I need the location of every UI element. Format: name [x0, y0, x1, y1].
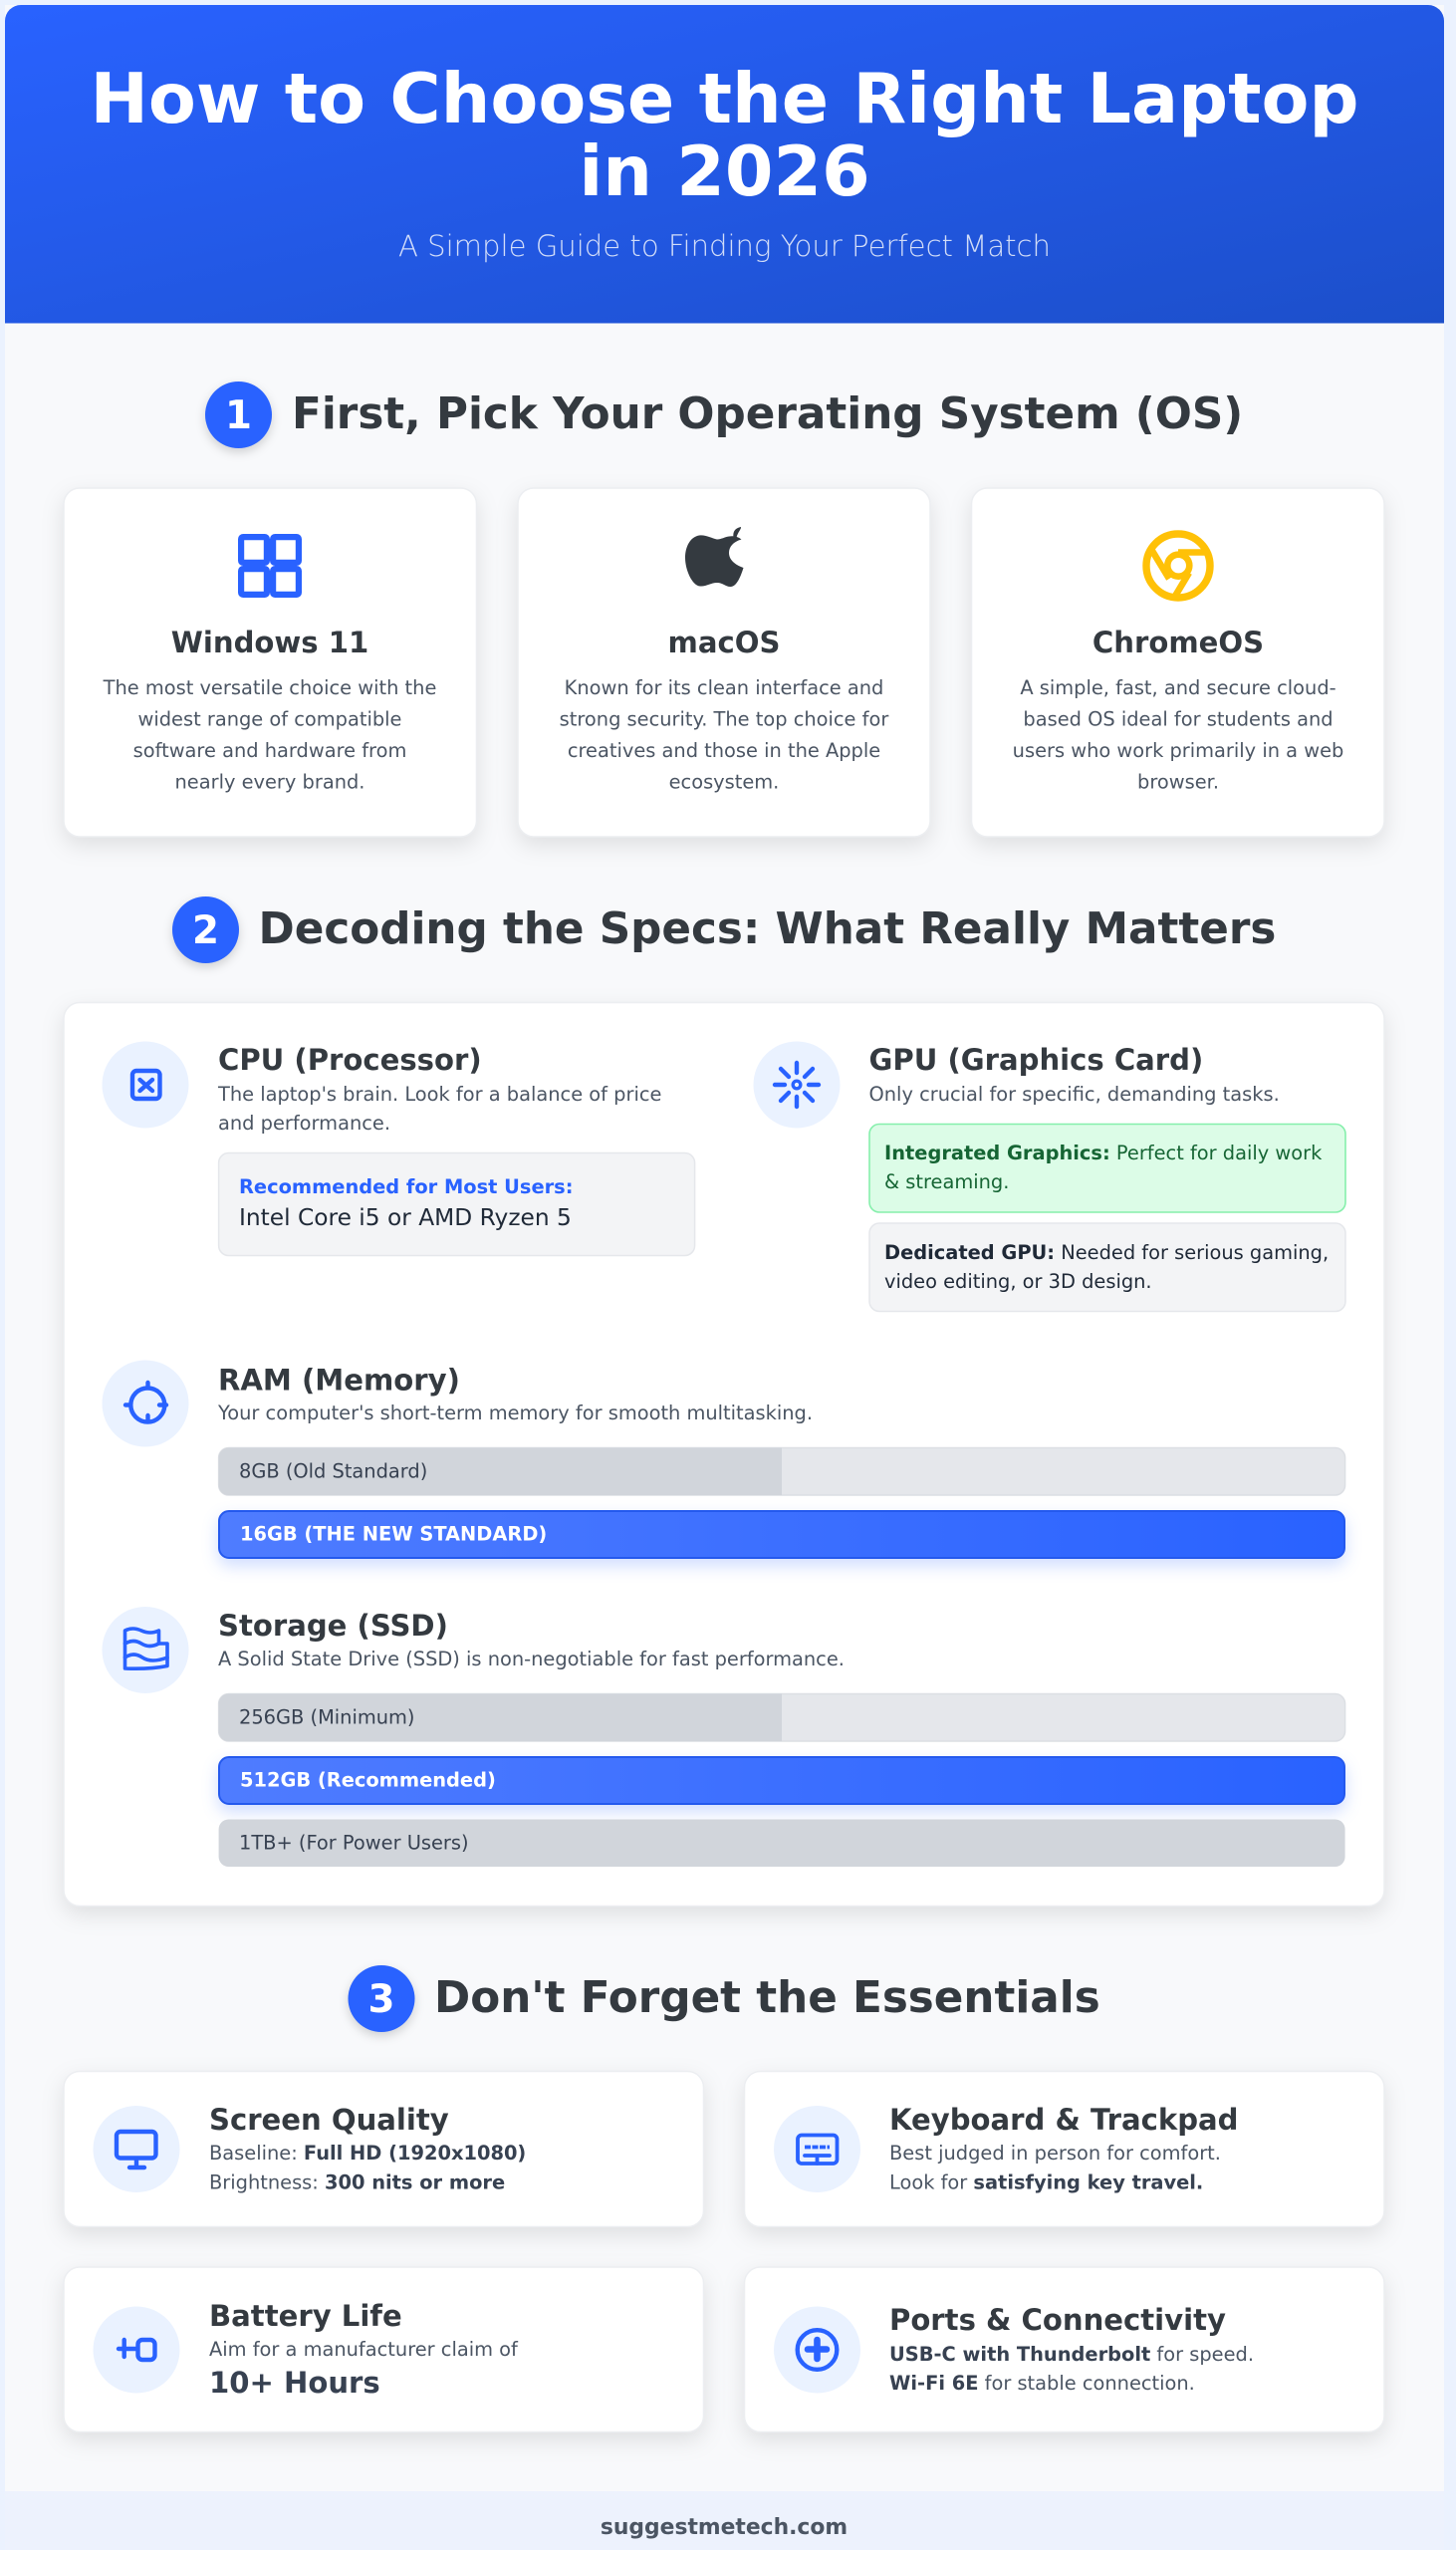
panel: ChromeOS: browser. — [1137, 771, 1219, 793]
panel: ports: Wi-Fi 6E — [889, 2372, 978, 2395]
section 2 heading: 2 — [192, 908, 219, 953]
panel: macOS: ecosystem. — [669, 771, 779, 793]
icon: battery — [119, 2340, 155, 2360]
subtitle: A Simple Guide to Finding Your Perfect Match — [398, 229, 1051, 263]
panel: specs — [64, 1002, 1384, 1907]
icon: chrome — [1146, 534, 1210, 598]
callout: dedicated GPU: Dedicated GPU: — [884, 1241, 1055, 1264]
panel: ports — [745, 2267, 1384, 2432]
RAM block — [102, 1361, 1345, 1558]
bar: 16GB — [219, 1511, 1344, 1558]
GPU block: GPU (Graphics Card) — [868, 1043, 1203, 1077]
icon: windows — [241, 537, 299, 595]
panel: macOS: strong security. The top choice for — [560, 707, 888, 731]
icon: ram — [125, 1383, 166, 1422]
bar: 1TB: 1TB+ (For Power Users) — [239, 1831, 469, 1855]
panel: ports: USB-C with Thunderbolt — [889, 2343, 1150, 2366]
panel: screen quality — [64, 2072, 703, 2227]
bar: 8GB: 8GB (Old Standard) — [239, 1460, 427, 1482]
callout: integrated graphics: Integrated Graphics: — [884, 1142, 1110, 1164]
panel: Windows 11: Windows 11 — [171, 626, 368, 659]
panel: screen quality: 300 nits or more — [325, 2171, 505, 2193]
callout: dedicated GPU: video editing, or 3D design. — [884, 1270, 1152, 1293]
callout: dedicated GPU — [869, 1223, 1345, 1311]
panel: ports: for speed. — [1150, 2343, 1254, 2366]
footer: suggestmetech.com — [601, 2515, 848, 2540]
icon: cpu — [132, 1071, 159, 1099]
panel: Windows 11: The most versatile choice with the — [103, 676, 436, 699]
bar: 256GB — [219, 1693, 1345, 1741]
panel: ChromeOS — [972, 488, 1384, 837]
bar: 1TB — [219, 1819, 1345, 1867]
panel: battery: 10+ Hours — [209, 2366, 380, 2400]
CPU block — [102, 1042, 695, 1255]
panel: screen quality: Screen Quality — [209, 2103, 449, 2137]
CPU block: The laptop's brain. Look for a balance of price — [217, 1083, 661, 1106]
GPU block — [753, 1042, 1345, 1311]
panel: keyboard — [745, 2072, 1384, 2227]
panel: keyboard: Keyboard & Trackpad — [889, 2103, 1239, 2137]
section 1 heading: First, Pick Your Operating System (OS) — [292, 388, 1243, 439]
section 1 heading: 1 — [225, 393, 252, 438]
callout: recommended CPU: Intel Core i5 or AMD Ryzen 5 — [239, 1204, 572, 1231]
section 3 heading — [349, 1965, 1100, 2032]
panel: Windows 11: software and hardware from — [133, 739, 406, 762]
panel: macOS — [518, 488, 930, 837]
panel: battery: Aim for a manufacturer claim of — [209, 2338, 519, 2361]
callout: integrated graphics: Perfect for daily work — [1110, 1142, 1323, 1164]
panel: keyboard: Look for — [889, 2171, 973, 2193]
panel: screen quality: Full HD (1920x1080) — [304, 2142, 526, 2165]
panel: battery — [64, 2267, 703, 2432]
section 3 heading: Don't Forget the Essentials — [434, 1972, 1100, 2023]
panel: screen quality: Brightness: — [209, 2171, 325, 2193]
callout: dedicated GPU: Needed for serious gaming, — [1055, 1241, 1329, 1264]
panel: ChromeOS: based OS ideal for students and — [1023, 707, 1334, 731]
Storage block: Storage (SSD) — [218, 1609, 448, 1643]
panel: keyboard: satisfying key travel. — [973, 2171, 1203, 2193]
Storage block: A Solid State Drive (SSD) is non-negotiable for fast performance. — [218, 1648, 845, 1670]
panel: screen quality: Baseline: — [209, 2142, 304, 2165]
callout: integrated graphics: & streaming. — [884, 1170, 1009, 1193]
bar: 512GB — [219, 1757, 1344, 1804]
bar: 8GB — [219, 1448, 1345, 1495]
icon: ports — [798, 2330, 837, 2370]
panel: ChromeOS: A simple, fast, and secure cloud- — [1020, 676, 1336, 699]
panel: ports: for stable connection. — [978, 2372, 1195, 2395]
Storage block — [102, 1607, 1345, 1867]
callout: recommended CPU: Recommended for Most Users: — [239, 1175, 573, 1198]
section 2 heading: Decoding the Specs: What Really Matters — [259, 903, 1276, 954]
panel: Windows 11 — [64, 488, 476, 837]
title: How to Choose the Right Laptop — [90, 59, 1359, 139]
section 1 heading — [205, 382, 1243, 448]
CPU block: CPU (Processor) — [218, 1043, 482, 1077]
panel: ports: Ports & Connectivity — [889, 2303, 1226, 2337]
panel: ChromeOS: ChromeOS — [1092, 626, 1264, 659]
callout: recommended CPU — [219, 1153, 695, 1255]
RAM block: RAM (Memory) — [218, 1363, 460, 1397]
header banner — [5, 5, 1444, 323]
RAM block: Your computer's short-term memory for smooth multitasking. — [217, 1402, 813, 1424]
panel: macOS: Known for its clean interface and — [565, 676, 883, 699]
bar: 16GB: 16GB (THE NEW STANDARD) — [240, 1522, 547, 1546]
panel: Windows 11: widest range of compatible — [138, 707, 401, 731]
GPU block: Only crucial for specific, demanding tasks. — [868, 1083, 1280, 1106]
panel: battery: Battery Life — [209, 2299, 402, 2333]
panel: macOS: creatives and those in the Apple — [568, 739, 880, 762]
bar: 256GB: 256GB (Minimum) — [239, 1705, 414, 1729]
footer — [5, 2491, 1444, 2550]
section 3 heading: 3 — [368, 1977, 394, 2022]
callout: integrated graphics — [869, 1124, 1345, 1212]
icon: storage — [125, 1629, 167, 1668]
panel: macOS: macOS — [668, 626, 780, 659]
icon: keyboard — [798, 2136, 837, 2164]
title: in 2026 — [579, 131, 870, 212]
icon: monitor — [117, 2132, 155, 2168]
panel: Windows 11: nearly every brand. — [175, 771, 364, 793]
icon: gpu — [775, 1063, 819, 1107]
icon: apple — [685, 527, 743, 587]
panel: ChromeOS: users who work primarily in a web — [1013, 739, 1343, 762]
CPU block: and performance. — [218, 1112, 390, 1135]
bar: 512GB: 512GB (Recommended) — [240, 1769, 496, 1791]
panel: keyboard: Best judged in person for comfort. — [889, 2142, 1221, 2165]
